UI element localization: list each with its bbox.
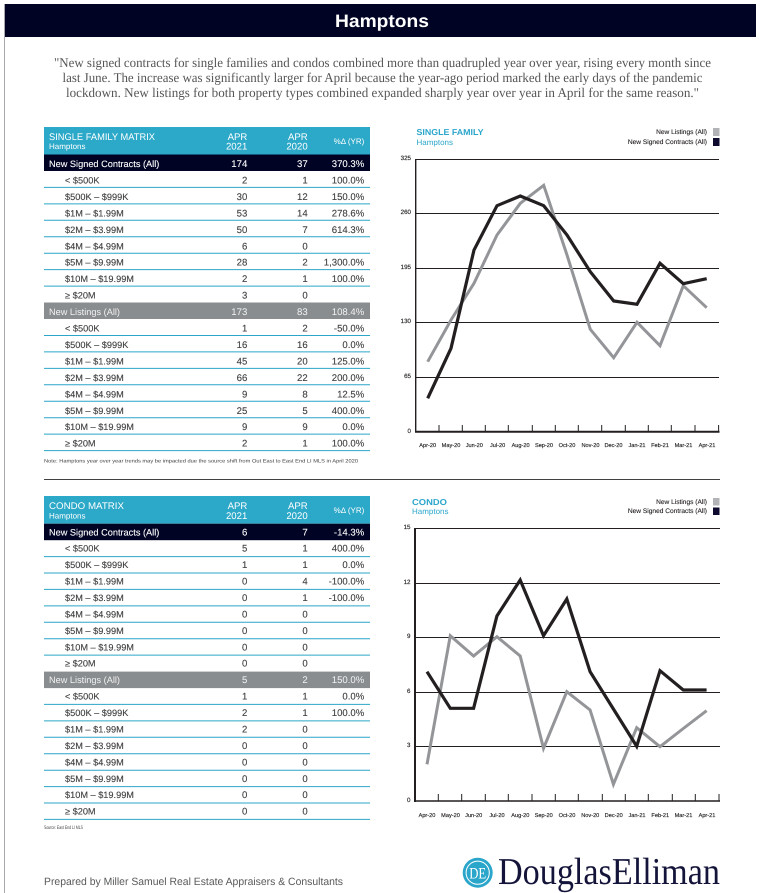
table header: condo: APR xyxy=(288,501,308,512)
table source note: Source: East End LI MLS xyxy=(44,825,83,831)
new listings rows: 0 xyxy=(302,724,308,736)
new listings rows: 100.0% xyxy=(332,438,365,450)
x axis labels xyxy=(419,442,715,449)
table header: single family xyxy=(44,127,370,154)
new signed contracts rows: < $500K xyxy=(65,544,100,554)
new listings rows: 66 xyxy=(237,373,247,384)
legend: condo: New Listings (All) xyxy=(656,499,707,506)
table header: condo: 2021 xyxy=(226,511,247,522)
x axis labels: Dec-20 xyxy=(604,443,623,449)
new signed contracts rows: 1 xyxy=(302,544,308,555)
panel: condo matrix table xyxy=(44,496,370,819)
panel: single family line chart xyxy=(401,127,720,449)
quote text block: last June. The increase was significantly larger for April because the year-ago period marked the early days of the pandemic xyxy=(62,70,703,85)
y axis labels: 260 xyxy=(401,209,412,216)
new listings rows: 108.4% xyxy=(332,307,365,318)
new listings rows: 0.0% xyxy=(342,422,365,433)
new signed contracts rows: $2M – $3.99M xyxy=(65,593,124,603)
new signed contracts rows: $2M – $3.99M xyxy=(65,225,124,235)
new listings rows: 0 xyxy=(302,807,308,818)
new listings rows: $5M – $9.99M xyxy=(65,406,124,416)
y axis labels xyxy=(404,524,411,804)
legend: condo xyxy=(628,498,720,515)
quote text block xyxy=(54,55,711,100)
new listings rows: 16 xyxy=(237,340,247,351)
new listings rows: $1M – $1.99M xyxy=(65,356,124,366)
new signed contracts rows: 614.3% xyxy=(332,225,365,236)
x axis labels xyxy=(419,812,715,819)
x axis labels: Aug-20 xyxy=(512,443,530,449)
new listings rows: 150.0% xyxy=(332,675,365,686)
new listings rows: < $500K xyxy=(65,692,100,702)
new signed contracts rows: $4M – $4.99M xyxy=(65,241,124,251)
new signed contracts rows: 1 xyxy=(302,274,308,285)
y axis labels: 3 xyxy=(407,742,411,749)
footer credit: Prepared by Miller Samuel Real Estate Appraisers & Consultants xyxy=(44,876,343,888)
new listings rows: 8 xyxy=(302,389,308,400)
row highlights and rules xyxy=(44,154,370,451)
new listings rows: -50.0% xyxy=(334,324,365,334)
new signed contracts rows: 0 xyxy=(302,241,308,252)
legend: single family: New Listings (All) xyxy=(656,129,707,136)
new listings rows: 2 xyxy=(302,324,308,334)
new listings rows: 22 xyxy=(297,373,308,384)
new signed contracts rows: $1M – $1.99M xyxy=(65,208,124,218)
icon: logo roundel xyxy=(463,858,493,888)
y axis labels: 0 xyxy=(408,428,412,435)
new listings rows: 0.0% xyxy=(342,340,365,351)
new listings rows: 0 xyxy=(242,790,247,801)
new signed contracts rows: 1 xyxy=(242,560,247,571)
new signed contracts rows: $10M – $19.99M xyxy=(65,642,134,652)
x axis labels: Jul-20 xyxy=(489,812,505,819)
x axis labels: Oct-20 xyxy=(559,813,575,819)
new signed contracts rows: $10M – $19.99M xyxy=(65,274,134,284)
new signed contracts rows: 174 xyxy=(231,159,248,170)
chart heading: single family: Hamptons xyxy=(416,138,453,147)
new signed contracts rows: 0 xyxy=(242,642,247,653)
new listings rows: 1 xyxy=(242,692,247,703)
new listings rows: 0 xyxy=(242,757,247,768)
new signed contracts rows: 4 xyxy=(302,577,308,588)
new signed contracts rows: 5 xyxy=(242,544,247,555)
new listings rows: < $500K xyxy=(65,324,100,334)
new signed contracts rows: 0 xyxy=(242,593,247,604)
x axis labels: Nov-20 xyxy=(581,443,600,449)
new signed contracts rows: -100.0% xyxy=(329,577,365,588)
y axis labels: 325 xyxy=(401,155,412,162)
new signed contracts rows: 100.0% xyxy=(332,274,365,285)
table header: single family: SINGLE FAMILY MATRIX xyxy=(49,132,156,143)
line: new signed contracts single family xyxy=(428,196,707,398)
new signed contracts rows: New Signed Contracts (All) xyxy=(49,159,159,169)
new signed contracts rows: 0 xyxy=(242,577,247,588)
new signed contracts rows xyxy=(49,527,365,670)
new signed contracts rows: 1 xyxy=(302,593,308,604)
new signed contracts rows: ≥ $20M xyxy=(65,659,96,669)
new signed contracts rows: 1,300.0% xyxy=(324,258,365,269)
new listings rows: 0 xyxy=(302,741,308,752)
new listings rows: $10M – $19.99M xyxy=(65,790,134,800)
x axis labels: Apr-21 xyxy=(699,443,715,449)
x axis labels: Mar-21 xyxy=(675,443,692,449)
new listings rows: ≥ $20M xyxy=(65,807,96,817)
new listings rows: $4M – $4.99M xyxy=(65,389,124,399)
new listings rows: 0 xyxy=(242,741,247,752)
new listings rows: 125.0% xyxy=(332,356,365,367)
grid and axes xyxy=(414,528,720,802)
new signed contracts rows: 100.0% xyxy=(332,176,365,186)
new signed contracts rows: -14.3% xyxy=(334,527,365,538)
panel: condo line chart xyxy=(404,497,720,819)
x axis labels: Jun-20 xyxy=(465,813,482,819)
x axis labels: May-20 xyxy=(442,443,460,449)
new listings rows: 400.0% xyxy=(332,406,365,417)
new signed contracts rows: 0.0% xyxy=(342,560,365,571)
new signed contracts rows: $500K – $999K xyxy=(65,560,129,570)
new listings rows: 0.0% xyxy=(342,692,365,703)
x axis labels: Jul-20 xyxy=(490,442,505,449)
new signed contracts rows: 150.0% xyxy=(332,192,365,203)
x axis labels: Nov-20 xyxy=(581,813,599,819)
new signed contracts rows: ≥ $20M xyxy=(65,291,96,301)
table header: condo: CONDO MATRIX xyxy=(49,501,125,512)
new listings rows: $5M – $9.99M xyxy=(65,774,124,784)
new signed contracts rows: 1 xyxy=(302,560,308,571)
x axis labels: Feb-21 xyxy=(651,442,669,449)
y axis labels: 15 xyxy=(404,524,411,531)
new listings rows: 0 xyxy=(302,757,308,768)
new listings rows: 2 xyxy=(242,724,247,736)
new listings rows: 83 xyxy=(297,307,308,318)
table header: single family: 2020 xyxy=(286,142,308,152)
chart heading: single family xyxy=(416,127,484,147)
new signed contracts rows: 2 xyxy=(242,176,247,186)
new listings rows: 200.0% xyxy=(332,373,365,384)
y axis labels: 9 xyxy=(407,633,411,640)
x axis labels: Mar-21 xyxy=(675,813,692,819)
new listings rows: 173 xyxy=(231,307,247,318)
panel: single family matrix table xyxy=(44,127,370,451)
table header: condo xyxy=(44,496,370,524)
new signed contracts rows: 6 xyxy=(242,527,247,538)
new signed contracts rows: 53 xyxy=(237,208,247,219)
new signed contracts rows: < $500K xyxy=(65,176,100,186)
new listings rows xyxy=(49,675,365,818)
new listings rows: $1M – $1.99M xyxy=(65,724,124,734)
legend: single family xyxy=(628,128,720,146)
new signed contracts rows: 3 xyxy=(242,291,247,302)
x axis labels: Jan-21 xyxy=(628,443,646,449)
new listings rows: 20 xyxy=(297,356,308,367)
new listings rows: 1 xyxy=(302,438,308,450)
table header: condo: %Δ (YR) xyxy=(334,506,365,515)
new listings rows: New Listings (All) xyxy=(49,307,120,317)
new signed contracts rows: 1 xyxy=(302,176,308,186)
x axis labels: Sep-20 xyxy=(535,443,553,449)
y axis labels: 195 xyxy=(401,264,412,271)
new signed contracts rows: 0 xyxy=(302,626,308,637)
table header: single family: APR xyxy=(228,132,247,143)
new signed contracts rows: 14 xyxy=(297,208,308,219)
new signed contracts rows: $4M – $4.99M xyxy=(65,610,124,620)
y axis labels: 6 xyxy=(407,688,411,695)
new signed contracts rows: -100.0% xyxy=(329,593,365,604)
new listings rows: $2M – $3.99M xyxy=(65,741,124,751)
new signed contracts rows: 37 xyxy=(297,159,308,170)
new signed contracts rows: 6 xyxy=(242,241,247,252)
new signed contracts rows: 2 xyxy=(302,258,308,269)
new listings rows: 0 xyxy=(302,790,308,801)
chart heading: condo: Hamptons xyxy=(412,507,448,516)
x axis labels: Dec-20 xyxy=(605,813,623,819)
table header: single family: 2021 xyxy=(226,142,247,152)
new signed contracts rows: 400.0% xyxy=(332,544,365,555)
new signed contracts rows: 7 xyxy=(302,225,308,236)
x axis labels: Sep-20 xyxy=(535,813,553,819)
new listings rows: 12.5% xyxy=(337,389,365,400)
new signed contracts rows: 0 xyxy=(302,610,308,620)
y axis labels: 130 xyxy=(401,318,412,325)
y axis labels: 0 xyxy=(407,797,411,804)
new signed contracts rows: 0 xyxy=(302,659,308,670)
new listings rows: 9 xyxy=(242,389,247,400)
new listings rows: 1 xyxy=(302,708,308,719)
new signed contracts rows: New Signed Contracts (All) xyxy=(49,527,159,537)
new listings rows: ≥ $20M xyxy=(65,438,96,448)
x axis labels: Apr-21 xyxy=(699,813,715,819)
new listings rows xyxy=(49,307,365,450)
new listings rows: 2 xyxy=(242,438,247,450)
new signed contracts rows xyxy=(49,159,365,302)
new signed contracts rows: 0 xyxy=(302,291,308,302)
line: new listings condo xyxy=(427,636,707,784)
y axis labels: 12 xyxy=(404,579,411,586)
table header: condo: Hamptons xyxy=(49,512,85,520)
table header: single family: %Δ (YR) xyxy=(334,137,365,146)
new signed contracts rows: 12 xyxy=(297,192,308,203)
logo: Douglas Elliman: DouglasElliman xyxy=(498,851,720,893)
new listings rows: 0 xyxy=(242,774,247,785)
x axis labels: Jan-21 xyxy=(628,813,646,819)
table header: condo: 2020 xyxy=(286,511,308,522)
new listings rows: 0 xyxy=(242,807,247,818)
row highlights and rules xyxy=(44,524,370,819)
new signed contracts rows: 0 xyxy=(242,659,247,670)
x axis labels: May-20 xyxy=(441,813,460,819)
new signed contracts rows: 50 xyxy=(237,225,247,236)
x axis labels: Aug-20 xyxy=(511,813,529,819)
x axis labels: Apr-20 xyxy=(419,813,435,819)
new signed contracts rows: 28 xyxy=(237,258,247,269)
new signed contracts rows: 2 xyxy=(242,274,247,285)
new listings rows: 45 xyxy=(237,356,247,367)
new signed contracts rows: 278.6% xyxy=(332,208,365,219)
legend: single family: New Signed Contracts (All) xyxy=(628,139,707,146)
new listings rows: 2 xyxy=(302,675,308,686)
icon: logo roundel: DE xyxy=(469,866,486,882)
new signed contracts rows: $5M – $9.99M xyxy=(65,258,124,268)
new listings rows: 100.0% xyxy=(332,708,365,719)
table note: Note: Hamptons year over year trends may be impacted due the source shift from Out East to East End LI MLS in April 2020 xyxy=(44,458,358,464)
new signed contracts rows: 370.3% xyxy=(332,159,365,170)
new listings rows: $10M – $19.99M xyxy=(65,422,134,432)
grid and axes xyxy=(415,159,720,432)
x axis labels: Apr-20 xyxy=(419,443,436,449)
new listings rows: New Listings (All) xyxy=(49,675,120,685)
new listings rows: 16 xyxy=(297,340,308,351)
new listings rows: $2M – $3.99M xyxy=(65,373,124,383)
new signed contracts rows: $1M – $1.99M xyxy=(65,577,124,587)
new signed contracts rows: 0 xyxy=(242,626,247,637)
line: new listings single family xyxy=(428,185,707,362)
new signed contracts rows: 0 xyxy=(242,610,247,620)
y axis labels: 65 xyxy=(404,373,412,380)
new signed contracts rows: 7 xyxy=(302,527,308,538)
x axis labels: Jun-20 xyxy=(466,443,483,449)
legend: condo: New Signed Contracts (All) xyxy=(628,508,707,515)
table header: single family: APR xyxy=(288,132,308,143)
new listings rows: $500K – $999K xyxy=(65,708,129,718)
chart heading: condo: CONDO xyxy=(412,497,447,507)
new listings rows: 1 xyxy=(242,324,247,334)
new signed contracts rows: $5M – $9.99M xyxy=(65,626,124,636)
table header: single family: Hamptons xyxy=(49,142,85,151)
x axis labels: Feb-21 xyxy=(651,812,669,819)
new listings rows: $500K – $999K xyxy=(65,340,129,350)
new listings rows: 9 xyxy=(302,422,308,433)
chart heading: single family: SINGLE FAMILY xyxy=(416,127,484,137)
new listings rows: 0 xyxy=(302,774,308,785)
new signed contracts rows: 30 xyxy=(237,192,247,203)
chart heading: condo xyxy=(412,497,448,516)
new signed contracts rows: $500K – $999K xyxy=(65,192,129,202)
title banner xyxy=(5,4,756,37)
title banner: Hamptons xyxy=(335,11,429,31)
y axis labels xyxy=(401,155,412,435)
quote text block: lockdown. New listings for both property types combined expanded sharply year over year in April for the same reason." xyxy=(66,85,699,100)
x axis labels: Oct-20 xyxy=(559,443,575,449)
quote text block: "New signed contracts for single families and condos combined more than quadrupled year over year, rising every month since xyxy=(54,55,711,70)
line: new signed contracts condo xyxy=(427,580,707,746)
new listings rows: 9 xyxy=(242,422,247,433)
table header: condo: APR xyxy=(228,501,247,512)
new listings rows: 2 xyxy=(242,708,247,719)
new listings rows: 1 xyxy=(302,692,308,703)
new listings rows: 5 xyxy=(242,675,247,686)
new listings rows: 25 xyxy=(237,406,247,417)
new listings rows: 5 xyxy=(302,406,308,417)
new listings rows: $4M – $4.99M xyxy=(65,757,124,767)
new signed contracts rows: 0 xyxy=(302,642,308,653)
